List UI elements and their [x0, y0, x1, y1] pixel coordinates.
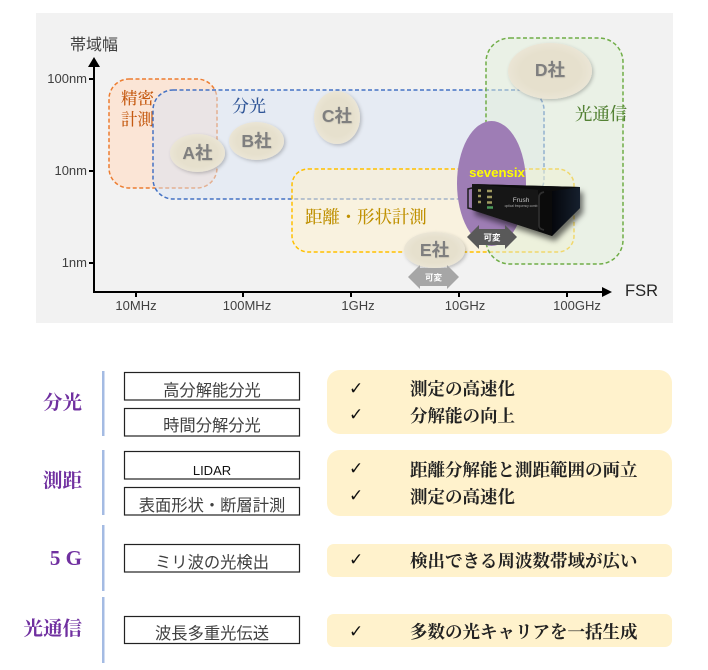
region: spectroscopy: 分光: [232, 97, 266, 116]
arrow: sevensix variable range: 可変: [483, 232, 501, 244]
application: surface and tomography: 表面形状・断層計測: [139, 492, 285, 516]
application: WDM transmission: 波長多重光伝送: [155, 620, 269, 644]
benefits: ✓: [349, 486, 363, 506]
row: spectroscopy: [43, 370, 672, 436]
icon: rack device: optical frequency comb: [505, 204, 538, 208]
benefits: 多数の光キャリアを一括生成: [410, 622, 638, 642]
region: distance and shape measurement: [292, 169, 574, 252]
arrow: E variable range: [408, 265, 459, 289]
benefits: ✓: [349, 550, 363, 570]
region: precision measurement: [109, 79, 217, 188]
row label: 測距: [43, 470, 82, 492]
axis title: bandwidth: 帯域幅: [70, 31, 118, 55]
row label: 光通信: [23, 618, 82, 640]
company A: [170, 134, 225, 172]
y axis labels: 10nm: [54, 163, 87, 178]
company A: A社: [182, 143, 213, 163]
y axis labels: [47, 71, 87, 270]
region: optical communication: [486, 38, 627, 264]
application: time resolved spectroscopy: [124, 408, 300, 436]
application: WDM transmission: [124, 616, 300, 644]
company: sevensix ellipse: sevensix: [469, 165, 526, 180]
application: high resolution spectroscopy: 高分解能分光: [163, 377, 261, 401]
y axis labels: 100nm: [47, 71, 87, 86]
row: 5G: [50, 525, 672, 591]
application: LIDAR: [124, 452, 300, 479]
icon: rack device: Frush: [513, 197, 530, 204]
region: precision measurement: 精密: [121, 89, 154, 108]
company B: B社: [241, 131, 272, 151]
application: time resolved spectroscopy: 時間分解分光: [163, 412, 261, 436]
benefits: [327, 544, 672, 577]
benefits: 分解能の向上: [410, 406, 515, 426]
application: high resolution spectroscopy: [124, 372, 300, 401]
icon: rack device: [468, 184, 580, 236]
company: sevensix ellipse: [457, 121, 526, 246]
region: spectroscopy: [153, 90, 544, 199]
y axis labels: 1nm: [62, 255, 87, 270]
region: precision measurement: 計測: [121, 110, 154, 129]
row label: 分光: [43, 392, 82, 414]
company E: [404, 232, 465, 268]
row label: 5 G: [50, 546, 82, 570]
arrow: sevensix variable range: [467, 225, 517, 249]
region: distance and shape measurement: 距離・形状計測: [305, 207, 427, 227]
company C: C社: [322, 106, 353, 126]
benefits: [327, 450, 672, 516]
region: optical communication: 光通信: [575, 104, 627, 124]
x axis labels: 10GHz: [445, 298, 485, 313]
benefits: [327, 370, 672, 434]
company C: [314, 91, 360, 144]
benefits: [327, 614, 672, 647]
x axis labels: 100GHz: [553, 298, 601, 313]
x axis labels: 100MHz: [223, 298, 271, 313]
row: optical communication: [23, 597, 672, 663]
benefits: ✓: [349, 405, 363, 425]
axis title: FSR: FSR: [625, 282, 658, 300]
row: ranging: [43, 450, 672, 516]
arrow: E variable range: 可変: [425, 272, 442, 284]
benefits: 測定の高速化: [410, 379, 515, 399]
application: millimeter wave detection: [124, 544, 300, 573]
benefits: ✓: [349, 459, 363, 479]
company D: D社: [535, 60, 566, 80]
panel: positioning chart: [36, 13, 673, 323]
company B: [229, 122, 284, 160]
benefits: 距離分解能と測距範囲の両立: [410, 460, 638, 480]
benefits: 検出できる周波数帯域が広い: [410, 551, 638, 571]
x axis labels: [115, 298, 601, 313]
benefits: ✓: [349, 622, 363, 642]
benefits: 測定の高速化: [410, 487, 515, 507]
company E: E社: [420, 240, 450, 260]
x axis labels: 1GHz: [341, 298, 375, 313]
benefits: ✓: [349, 379, 363, 399]
company D: [508, 43, 592, 99]
application: LIDAR: LIDAR: [193, 463, 231, 478]
axes: [88, 57, 612, 297]
x axis labels: 10MHz: [115, 298, 157, 313]
application: millimeter wave detection: ミリ波の光検出: [155, 549, 269, 573]
